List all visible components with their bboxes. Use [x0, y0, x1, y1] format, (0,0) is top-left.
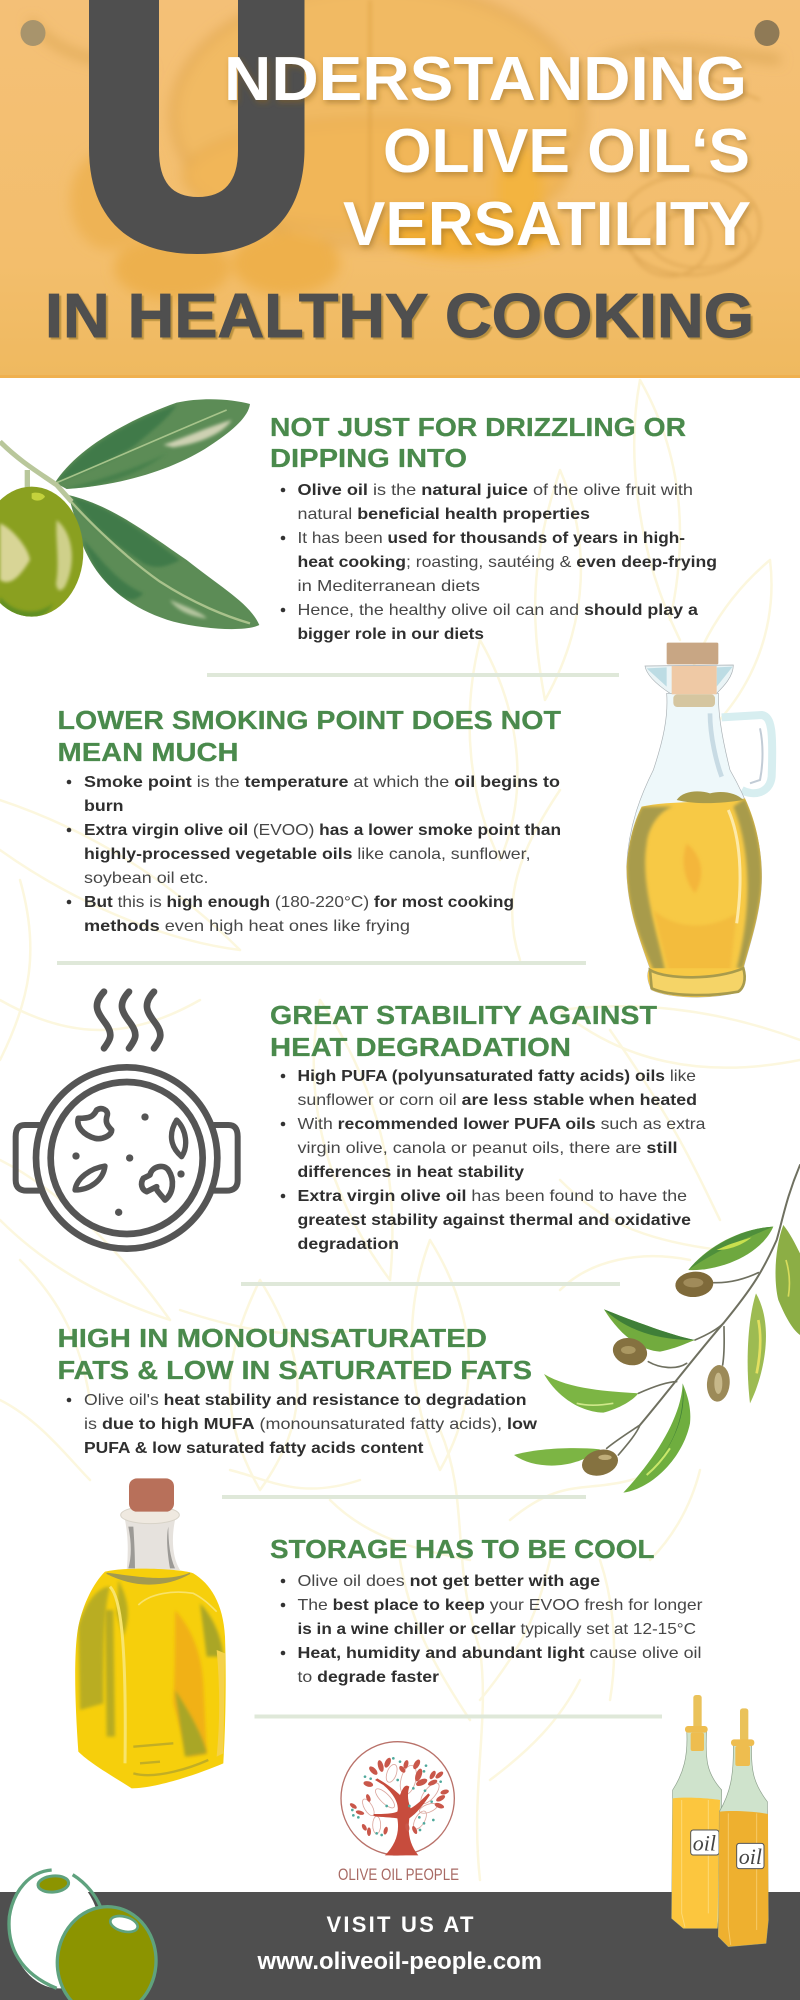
bullet list: natural juice — [281, 482, 717, 643]
big letter U — [89, 0, 304, 254]
bullet list: PUFA oils: Extra virgin olive oil has been found to have the — [298, 1188, 687, 1205]
left bottle — [672, 1695, 722, 1928]
bullet list: smoke point: soybean oil etc. — [84, 870, 208, 887]
bullet list: natural juice: heat cooking ; roasting, sautéing & even deep-frying — [298, 554, 717, 571]
bullet list: MUFA: is due to high MUFA (monounsaturated fatty acids), low — [84, 1416, 538, 1433]
heading: high in monounsaturated: FATS & LOW IN SATURATED FATS — [58, 1357, 532, 1385]
illustration: square oil bottle — [75, 1478, 226, 1788]
pin right — [754, 20, 780, 46]
bullet list: storage tips: Olive oil does not get better with age — [298, 1573, 600, 1590]
title: NDERSTANDING — [224, 45, 747, 114]
bullet list: smoke point: burn — [84, 798, 124, 815]
illustration: two oil bottles — [672, 1695, 768, 1947]
left bottle: oil — [693, 1831, 716, 1856]
section 1 — [270, 414, 717, 643]
bullet list: storage tips: Heat, humidity and abundant light cause olive oil — [298, 1645, 702, 1662]
heading: not just for drizzling — [270, 414, 686, 473]
bullet list: smoke point: highly-processed vegetable oils like canola, sunflower, — [84, 846, 530, 863]
logo: olive oil people — [341, 1742, 454, 1855]
footer: visit us: VISIT US AT — [326, 1912, 474, 1937]
right bottle — [718, 1708, 768, 1947]
right bottle: oil — [739, 1844, 762, 1869]
bullet list: MUFA: Olive oil's heat stability and resistance to degradation — [84, 1392, 526, 1409]
bullet list: natural juice: in Mediterranean diets — [298, 578, 480, 595]
bullet list: smoke point — [67, 774, 561, 935]
bullet list: smoke point: Extra virgin olive oil (EVOO) has a lower smoke point than — [84, 822, 561, 839]
bullet list: MUFA: PUFA & low saturated fatty acids content — [84, 1440, 424, 1457]
bullet list: storage tips: The best place to keep your EVOO fresh for longer — [298, 1597, 703, 1614]
bullet list: PUFA oils: With recommended lower PUFA oils such as extra — [298, 1116, 706, 1133]
section 5 — [270, 1536, 703, 1686]
section 2 — [58, 707, 561, 935]
bullet list: storage tips: to degrade faster — [298, 1669, 439, 1686]
heading: storage: STORAGE HAS TO BE COOL — [270, 1536, 654, 1564]
bullet list: natural juice: bigger role in our diets — [298, 626, 484, 643]
heading: high in monounsaturated: HIGH IN MONOUNSATURATED — [58, 1325, 487, 1353]
title — [224, 45, 751, 259]
bullet list: MUFA — [67, 1392, 538, 1457]
bullet list: natural juice: Hence, the healthy olive oil can and should play a — [298, 602, 698, 619]
bullet list: PUFA oils: sunflower or corn oil are less stable when heated — [298, 1092, 697, 1109]
section 4 — [58, 1325, 538, 1457]
heading: great stability — [270, 1002, 657, 1062]
background: pale leaf pattern — [0, 380, 800, 1880]
bullet list: smoke point: But this is high enough (180-220°C) for most cooking — [84, 894, 514, 911]
bullet list: storage tips: is in a wine chiller or cellar typically set at 12-15°C — [298, 1621, 696, 1638]
section 3 — [270, 1002, 706, 1253]
illustration: olive branch — [0, 399, 259, 629]
heading: lower smoking point: LOWER SMOKING POINT DOES NOT — [58, 707, 561, 735]
bullet list: PUFA oils: greatest stability against thermal and oxidative — [298, 1212, 691, 1229]
logo wordmark: OLIVE OIL PEOPLE — [338, 1865, 459, 1884]
bullet list: natural juice: Olive oil is the natural juice of the olive fruit with — [298, 482, 693, 499]
heading: not just for drizzling: DIPPING INTO — [270, 445, 467, 473]
bullet list: natural juice: It has been used for thousands of years in high- — [298, 530, 685, 547]
header photo background — [0, 0, 800, 376]
illustration: two olives — [2, 1864, 161, 2000]
bullet list: natural juice: natural beneficial health properties — [298, 506, 590, 523]
icon: steaming pot — [16, 992, 238, 1249]
pin left — [20, 20, 46, 46]
header banner — [0, 0, 800, 378]
bullet list: PUFA oils — [281, 1068, 706, 1253]
illustration: glass jug of oil — [627, 643, 772, 997]
subtitle: IN HEALTHY COOKING — [45, 282, 754, 351]
title: VERSATILITY — [343, 190, 751, 259]
footer: website: www.oliveoil-people.com — [257, 1948, 542, 1975]
title: OLIVE OIL‘S — [383, 117, 750, 186]
bullet list: PUFA oils: virgin olive, canola or peanut oils, there are still — [298, 1140, 678, 1157]
heading: high in monounsaturated — [58, 1325, 532, 1385]
bullet list: smoke point: Smoke point is the temperature at which the oil begins to — [84, 774, 560, 791]
footer band — [0, 1892, 800, 2000]
heading: great stability: GREAT STABILITY AGAINST — [270, 1002, 657, 1030]
bullet list: PUFA oils: High PUFA (polyunsaturated fatty acids) oils like — [298, 1068, 696, 1085]
bullet list: PUFA oils: degradation — [298, 1236, 399, 1253]
heading: not just for drizzling: NOT JUST FOR DRIZZLING OR — [270, 414, 686, 442]
heading: lower smoking point: MEAN MUCH — [58, 739, 238, 767]
heading: lower smoking point — [58, 707, 561, 767]
bullet list: smoke point: methods even high heat ones like frying — [84, 918, 410, 935]
heading: great stability: HEAT DEGRADATION — [270, 1034, 571, 1062]
bullet list: PUFA oils: differences in heat stability — [298, 1164, 524, 1181]
bullet list: storage tips — [281, 1573, 703, 1686]
illustration: olive sprig — [514, 1165, 800, 1493]
